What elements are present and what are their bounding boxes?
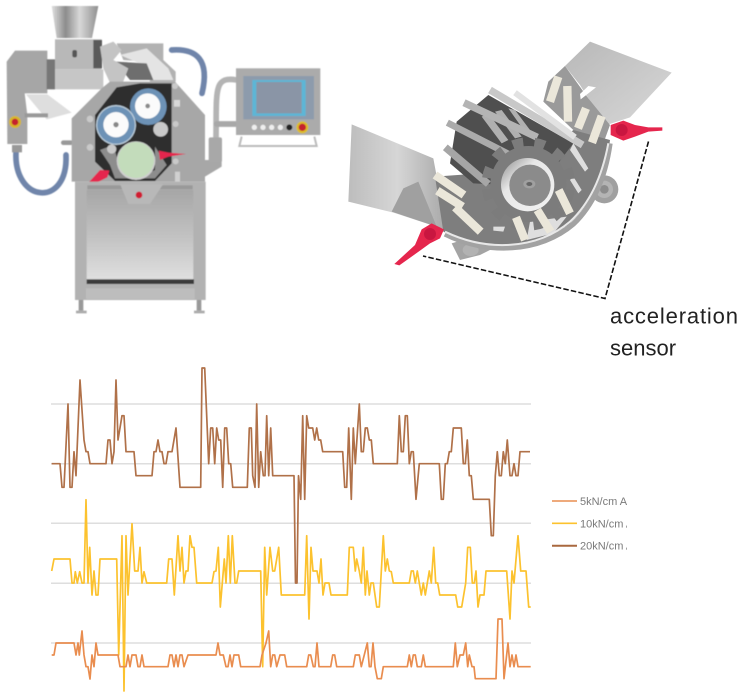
label: acceleration sensor: [610, 304, 739, 360]
legend item: 10kN/cm: 10kN/cm Avg: [580, 518, 645, 530]
machine: roller compactor photo: [7, 6, 320, 313]
feeder block: [55, 39, 102, 69]
lower pipe: [209, 137, 222, 162]
gear and trough illustration: [348, 42, 672, 265]
body side rails: [174, 100, 180, 107]
legend item: 5kN/cm: 5kN/cm A: [580, 496, 628, 508]
frame: [75, 182, 206, 300]
drum: [450, 95, 573, 187]
machine body: [72, 82, 222, 182]
label: acceleration sensor: sensor: [610, 336, 676, 360]
emergency stop left: [9, 116, 21, 128]
dashed leader line: [423, 142, 648, 298]
trough rim: [445, 143, 610, 248]
series: 5kN/cm: [52, 619, 531, 679]
left arm: [7, 51, 47, 144]
sensors on machine: [86, 151, 186, 185]
trough band: [445, 143, 608, 245]
trough white gaps: [493, 143, 588, 240]
control panel: [236, 68, 320, 146]
trough lugs: [590, 175, 618, 203]
right plate: [565, 42, 672, 125]
trough interior: [435, 130, 610, 246]
series: 20kN/cm: [52, 368, 530, 583]
bars: [445, 90, 583, 184]
roller window: [95, 83, 172, 181]
discharge: [120, 184, 163, 204]
bolts: [87, 83, 179, 187]
series: 10kN/cm: [52, 500, 531, 691]
left plate: [348, 124, 447, 230]
rollers: [96, 88, 167, 180]
hoses: [16, 50, 237, 193]
sensor right: [611, 121, 662, 141]
line chart: [51, 368, 531, 691]
label: acceleration sensor: acceleration: [610, 304, 739, 328]
legend item: 20kN/cm: 20kN/cm Avg: [580, 541, 645, 553]
sensor left: [394, 223, 444, 265]
gear wheel: [481, 137, 576, 231]
feet: [79, 300, 83, 311]
hopper: [52, 6, 98, 38]
upper linkage: [117, 43, 176, 82]
white paddles: [435, 77, 602, 240]
legend: [552, 497, 627, 550]
